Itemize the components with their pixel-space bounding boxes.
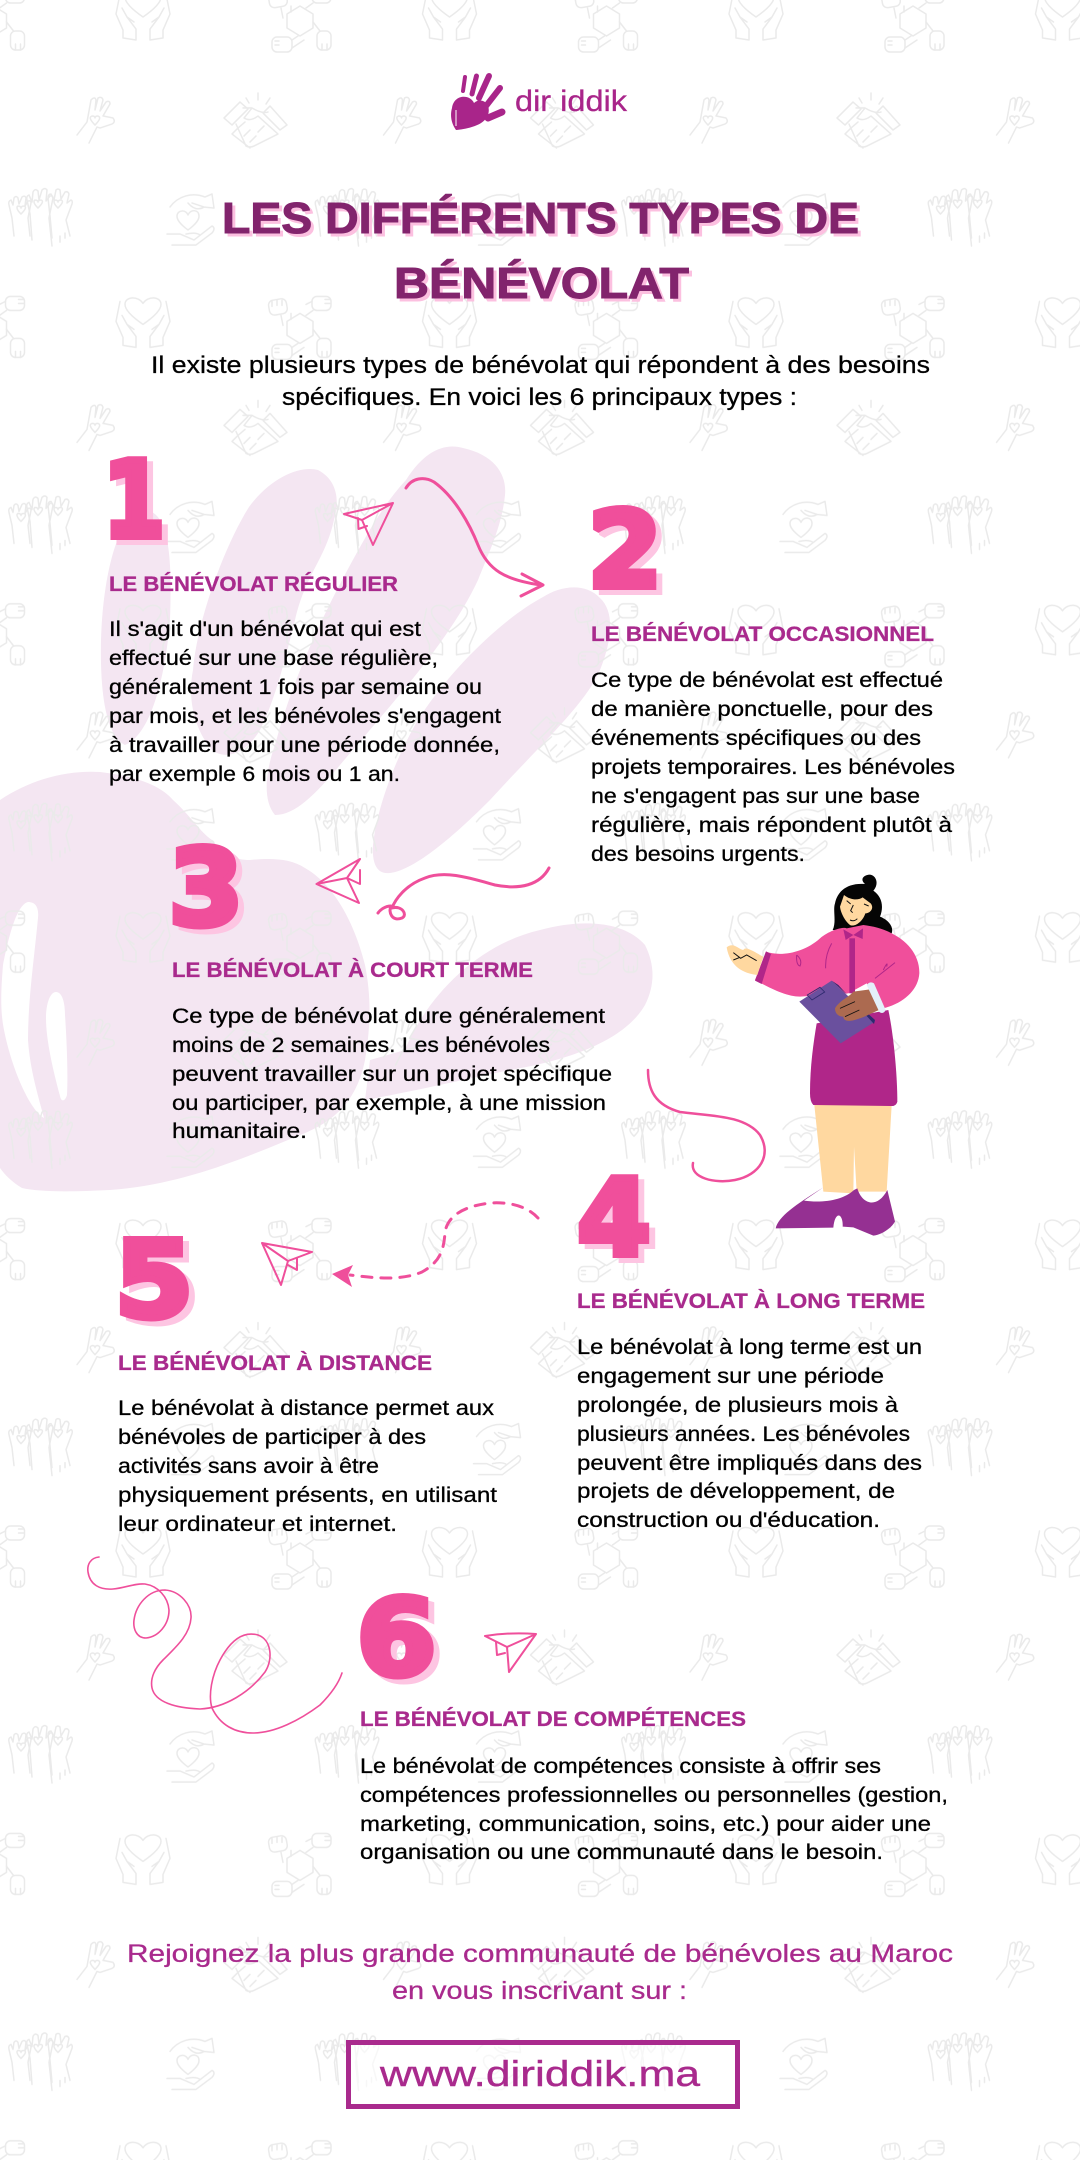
title <box>222 193 859 308</box>
panel: type 3 <box>169 828 612 1143</box>
body 4: prolongée, de plusieurs mois à <box>577 1394 898 1417</box>
body 6 <box>360 1755 948 1864</box>
call to action text: Rejoignez la plus grande communauté de bénévoles au Maroc <box>127 1940 953 1968</box>
illustration: woman with clipboard <box>727 875 919 1236</box>
body 3: moins de 2 semaines. Les bénévoles <box>172 1034 550 1057</box>
number 2: 2 <box>588 490 662 612</box>
website button <box>348 2042 738 2106</box>
body 5: activités sans avoir à être <box>118 1455 379 1478</box>
intro text: Il existe plusieurs types de bénévolat qui répondent à des besoins <box>151 352 930 379</box>
body 5: leur ordinateur et internet. <box>118 1513 397 1536</box>
panel: type 2 <box>588 490 955 866</box>
body 1: par mois, et les bénévoles s'engagent <box>109 705 501 728</box>
body 2: ne s'engagent pas sur une base <box>591 785 920 808</box>
icon: paper plane 3 <box>262 1243 312 1285</box>
title: LES DIFFÉRENTS TYPES DE <box>222 193 859 243</box>
body 1: Il s'agit d'un bénévolat qui est <box>109 618 421 641</box>
body 3: humanitaire. <box>172 1120 307 1143</box>
intro text: spécifiques. En voici les 6 principaux types : <box>282 384 797 411</box>
body 1 <box>109 618 501 786</box>
body 2: des besoins urgents. <box>591 843 805 866</box>
call to action text: en vous inscrivant sur : <box>392 1977 687 2005</box>
body 5: bénévoles de participer à des <box>118 1426 426 1449</box>
scribble line <box>88 1557 342 1733</box>
logo wordmark: dir iddik <box>515 85 628 118</box>
swirl under figure <box>648 1070 765 1181</box>
panel: type 5 <box>115 1220 497 1536</box>
body 2 <box>591 669 955 866</box>
heading 6: LE BÉNÉVOLAT DE COMPÉTENCES <box>360 1708 746 1731</box>
heading 1: LE BÉNÉVOLAT RÉGULIER <box>109 573 398 596</box>
icon: paper plane 1 <box>344 503 393 545</box>
body 6: marketing, communication, soins, etc.) pour aider une <box>360 1813 931 1836</box>
call to action text <box>127 1940 953 2005</box>
body 3: peuvent travailler sur un projet spécifique <box>172 1063 612 1086</box>
number 4: 4 <box>578 1158 650 1280</box>
arrow from 1 to 2 <box>406 479 543 596</box>
squiggle from 2 to 3 <box>378 868 549 919</box>
logo <box>451 76 628 130</box>
heading 2: LE BÉNÉVOLAT OCCASIONNEL <box>591 623 934 646</box>
body 4 <box>577 1336 922 1532</box>
body 2: événements spécifiques ou des <box>591 727 921 750</box>
intro text <box>151 352 930 411</box>
body 6: organisation ou une communauté dans le besoin. <box>360 1841 883 1864</box>
body 2: Ce type de bénévolat est effectué <box>591 669 943 692</box>
dashed arrow from 4 to 5 <box>332 1203 538 1287</box>
heading 3: LE BÉNÉVOLAT À COURT TERME <box>172 959 533 982</box>
body 4: peuvent être impliqués dans des <box>577 1452 922 1475</box>
number 6: 6 <box>357 1578 436 1700</box>
body 2: régulière, mais répondent plutôt à <box>591 814 952 837</box>
body 5: Le bénévolat à distance permet aux <box>118 1397 495 1420</box>
panel: type 1 <box>103 440 501 786</box>
heading 5: LE BÉNÉVOLAT À DISTANCE <box>118 1352 432 1375</box>
body 1: généralement 1 fois par semaine ou <box>109 676 482 699</box>
body 5: physiquement présents, en utilisant <box>118 1484 497 1507</box>
number 3: 3 <box>169 828 243 950</box>
body 1: effectué sur une base régulière, <box>109 647 438 670</box>
body 4: plusieurs années. Les bénévoles <box>577 1423 910 1446</box>
body 4: construction ou d'éducation. <box>577 1509 880 1532</box>
icon: paper plane 4 <box>485 1633 536 1672</box>
body 2: projets temporaires. Les bénévoles <box>591 756 955 779</box>
number 5: 5 <box>115 1220 193 1342</box>
body 4: Le bénévolat à long terme est un <box>577 1336 922 1359</box>
panel: type 4 <box>577 1158 925 1532</box>
website button: www.diriddik.ma <box>379 2053 701 2094</box>
number 1: 1 <box>103 440 165 562</box>
background blob: handprint <box>0 447 652 1191</box>
heading 4: LE BÉNÉVOLAT À LONG TERME <box>577 1290 925 1313</box>
title: BÉNÉVOLAT <box>394 258 689 308</box>
body 1: par exemple 6 mois ou 1 an. <box>109 763 400 786</box>
icon: hand with heart <box>451 76 502 130</box>
body 4: projets de développement, de <box>577 1480 895 1503</box>
icon: paper plane 2 <box>316 859 360 903</box>
body 5 <box>118 1397 497 1536</box>
body 6: Le bénévolat de compétences consiste à offrir ses <box>360 1755 881 1778</box>
body 3: Ce type de bénévolat dure généralement <box>172 1005 605 1028</box>
body 3: ou participer, par exemple, à une mission <box>172 1092 606 1115</box>
body 1: à travailler pour une période donnée, <box>109 734 500 757</box>
body 6: compétences professionnelles ou personnelles (gestion, <box>360 1784 948 1807</box>
body 2: de manière ponctuelle, pour des <box>591 698 933 721</box>
body 4: engagement sur une période <box>577 1365 884 1388</box>
panel: type 6 <box>357 1578 948 1864</box>
body 3 <box>172 1005 612 1143</box>
